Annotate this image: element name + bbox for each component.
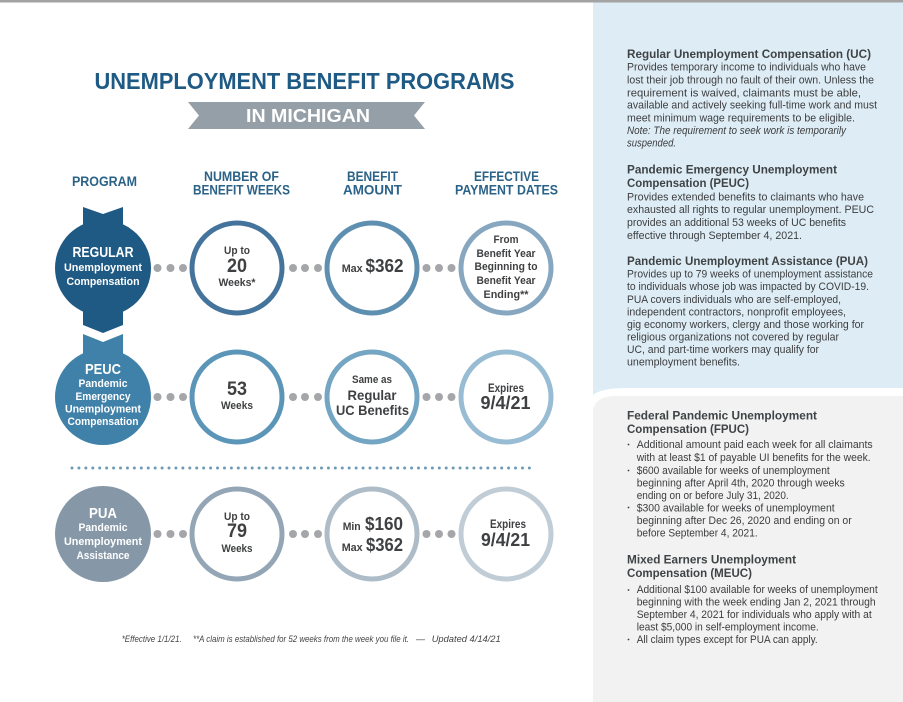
footnote: [122, 634, 501, 645]
text: regular UC: Regular Unemployment Compensation (UC): [627, 48, 871, 61]
program badge: PEUC: [55, 334, 151, 445]
footnote: **A claim is established for 52 weeks from the week you file it.: [193, 634, 409, 645]
weeks circle: up to 20: 20: [227, 256, 247, 277]
row: regular: [55, 207, 551, 333]
date circle: expires: Expires: [488, 381, 524, 395]
amount circle: min 160 max 362: $362: [366, 535, 403, 555]
date circle: expires: [461, 489, 551, 579]
program badge: PEUC: Pandemic: [78, 378, 128, 390]
weeks circle: up to 79: [192, 489, 282, 579]
text: PEUC: exhausted all rights to regular unemployment. PEUC: [627, 204, 874, 216]
weeks circle: 53: [192, 352, 282, 442]
text: MEUC: beginning with the week ending Jan 2, 2021 through: [637, 596, 876, 608]
program badge: PEUC: PEUC: [85, 361, 121, 378]
weeks circle: 53: Weeks: [221, 400, 253, 412]
text: FPUC: before September 4, 2021.: [637, 528, 758, 540]
text: PUA: to individuals whose job was impacted by COVID-19.: [627, 281, 869, 293]
text: regular UC: Note: The requirement to seek work is temporarily: [627, 125, 847, 137]
text: PUA: Provides up to 79 weeks of unemployment assistance: [627, 269, 873, 281]
text: FPUC: Federal Pandemic Unemployment: [627, 410, 817, 422]
weeks circle: up to 79: 79: [227, 521, 247, 542]
column heading: effective payment dates: EFFECTIVE: [474, 169, 539, 184]
weeks circle: up to 20: Weeks*: [218, 277, 256, 289]
text: FPUC: [627, 410, 873, 540]
date circle: benefit year: From: [494, 234, 519, 246]
connector dots: [154, 393, 187, 401]
column heading: number of benefit weeks: [193, 169, 290, 198]
amount circle: min 160 max 362: $160: [365, 514, 403, 534]
column heading: benefit amount: AMOUNT: [343, 182, 403, 198]
date circle: expires: Expires: [490, 517, 526, 531]
program badge: regular: [55, 207, 151, 333]
text: FPUC: beginning after Dec 26, 2020 and ending on or: [637, 515, 852, 527]
text: FPUC: Additional amount paid each week for all claimants: [637, 439, 873, 451]
text: PUA: independent contractors, nonprofit employees,: [627, 306, 846, 318]
text: MEUC: All claim types except for PUA can apply.: [637, 634, 818, 646]
text: PEUC: provides an additional 53 weeks of UC benefits: [627, 217, 846, 229]
date circle: benefit year: [461, 223, 551, 313]
footnote: *Effective 1/1/21.: [122, 634, 182, 645]
program badge: PUA: PUA: [89, 505, 117, 522]
text: regular UC: suspended.: [627, 138, 676, 150]
title: UNEMPLOYMENT BENEFIT PROGRAMS: [94, 68, 514, 94]
weeks circle: up to 20: [192, 223, 282, 313]
program badge: PEUC: Unemployment: [65, 404, 141, 416]
weeks circle: up to 79: Up to: [224, 511, 250, 523]
text: MEUC: [627, 554, 878, 646]
date circle: benefit year: Benefit Year: [476, 248, 536, 260]
date circle: benefit year: Benefit Year: [476, 275, 536, 287]
program badge: PEUC: Emergency: [76, 391, 131, 403]
subtitle ribbon: [188, 102, 425, 129]
amount circle: same as regular: [327, 352, 417, 442]
footnote: Updated 4/14/21: [432, 634, 501, 645]
date circle: expires: 9/4/21: [481, 530, 530, 550]
text: MEUC: September 4, 2021 for individuals who apply with at: [637, 609, 872, 621]
column heading: benefit amount: [343, 169, 403, 198]
program badge: PEUC: Compensation: [68, 416, 139, 428]
connector dots: [154, 530, 187, 538]
text: PUA: [627, 255, 873, 369]
amount circle: min 160 max 362: [327, 489, 417, 579]
weeks circle: up to 20: Up to: [224, 245, 250, 257]
text: PUA: PUA covers individuals who are self-employed,: [627, 294, 841, 306]
row: PUA: [55, 486, 551, 582]
date circle: benefit year: Ending**: [484, 289, 529, 301]
date circle: expires: 9/4/21: [480, 393, 530, 413]
amount circle: same as regular: Regular: [348, 387, 397, 403]
text: PEUC: Provides extended benefits to claimants who have: [627, 192, 864, 204]
text: FPUC: $600 available for weeks of unemployment: [637, 465, 830, 477]
connector dots: [289, 530, 322, 538]
amount circle: min 160 max 362: Max: [342, 542, 364, 554]
text: PEUC: [627, 164, 874, 242]
panel: federal supplements: [593, 396, 903, 702]
column heading: number of benefit weeks: NUMBER OF: [204, 169, 279, 184]
date circle: expires: [461, 352, 551, 442]
program badge: PUA: Assistance: [76, 550, 130, 562]
program badge: regular: Unemployment: [64, 262, 142, 274]
text: FPUC: beginning after April 4th, 2020 through weeks: [637, 477, 845, 489]
amount circle: min 160 max 362: Min: [343, 521, 361, 533]
text: regular UC: [627, 48, 877, 150]
connector dots: [422, 530, 456, 538]
text: MEUC: least $5,000 in self-employment income.: [637, 621, 819, 633]
text: PUA: religious organizations not covered by regular: [627, 332, 839, 344]
text: regular UC: lost their job through no fault of their own. Unless the: [627, 74, 874, 86]
date circle: benefit year: Beginning to: [474, 261, 538, 273]
amount circle: same as regular: UC Benefits: [336, 402, 409, 418]
program badge: PUA: Pandemic: [78, 522, 128, 534]
text: regular UC: requirement is waived, claimants must be able,: [627, 87, 861, 99]
text: MEUC: Compensation (MEUC): [627, 567, 752, 580]
amount circle: max 362: [327, 223, 417, 313]
column heading: benefit amount: BENEFIT: [347, 169, 399, 184]
program badge: PUA: Unemployment: [64, 536, 142, 548]
text: PUA: gig economy workers, clergy and those working for: [627, 319, 864, 331]
text: PEUC: effective through September 4, 2021.: [627, 230, 802, 242]
text: PUA: UC, and part-time workers may qualify for: [627, 344, 819, 356]
program badge: regular: Compensation: [66, 276, 140, 288]
text: PEUC: Pandemic Emergency Unemployment: [627, 164, 837, 176]
text: PUA: unemployment benefits.: [627, 357, 740, 369]
column heading: program: PROGRAM: [72, 174, 137, 189]
weeks circle: 53: 53: [227, 379, 247, 400]
connector dots: [422, 393, 456, 401]
text: FPUC: with at least $1 of payable UI benefits for the week.: [636, 452, 871, 464]
amount circle: max 362: Max: [342, 263, 364, 275]
text: regular UC: available and actively seeking full-time work and must: [627, 100, 877, 112]
column heading: effective payment dates: [455, 169, 558, 198]
connector dots: [154, 264, 187, 272]
amount circle: max 362: $362: [366, 256, 404, 276]
text: FPUC: Compensation (FPUC): [627, 423, 749, 436]
footnote: —: [415, 634, 425, 645]
amount circle: same as regular: Same as: [352, 374, 392, 386]
column heading: number of benefit weeks: BENEFIT WEEKS: [193, 182, 290, 198]
connector dots: [422, 264, 456, 272]
row: PEUC: [55, 334, 551, 445]
program badge: PUA: [55, 486, 151, 582]
weeks circle: up to 79: Weeks: [222, 543, 252, 555]
connector dots: [289, 393, 322, 401]
text: FPUC: $300 available for weeks of unemployment: [637, 502, 835, 514]
subtitle ribbon: IN MICHIGAN: [246, 106, 370, 126]
program badge: regular: REGULAR: [72, 245, 134, 261]
text: regular UC: Provides temporary income to individuals who have: [627, 62, 866, 74]
connector dots: [289, 264, 322, 272]
text: regular UC: meet minimum wage requirements to be eligible.: [627, 112, 855, 124]
text: MEUC: Mixed Earners Unemployment: [627, 554, 796, 566]
text: PUA: Pandemic Unemployment Assistance (PUA): [627, 255, 868, 268]
column heading: effective payment dates: PAYMENT DATES: [455, 182, 558, 198]
text: PEUC: Compensation (PEUC): [627, 177, 749, 190]
text: FPUC: ending on or before July 31, 2020.: [637, 490, 789, 502]
panel: program descriptions: [593, 2, 903, 395]
text: MEUC: Additional $100 available for weeks of unemployment: [637, 584, 878, 596]
